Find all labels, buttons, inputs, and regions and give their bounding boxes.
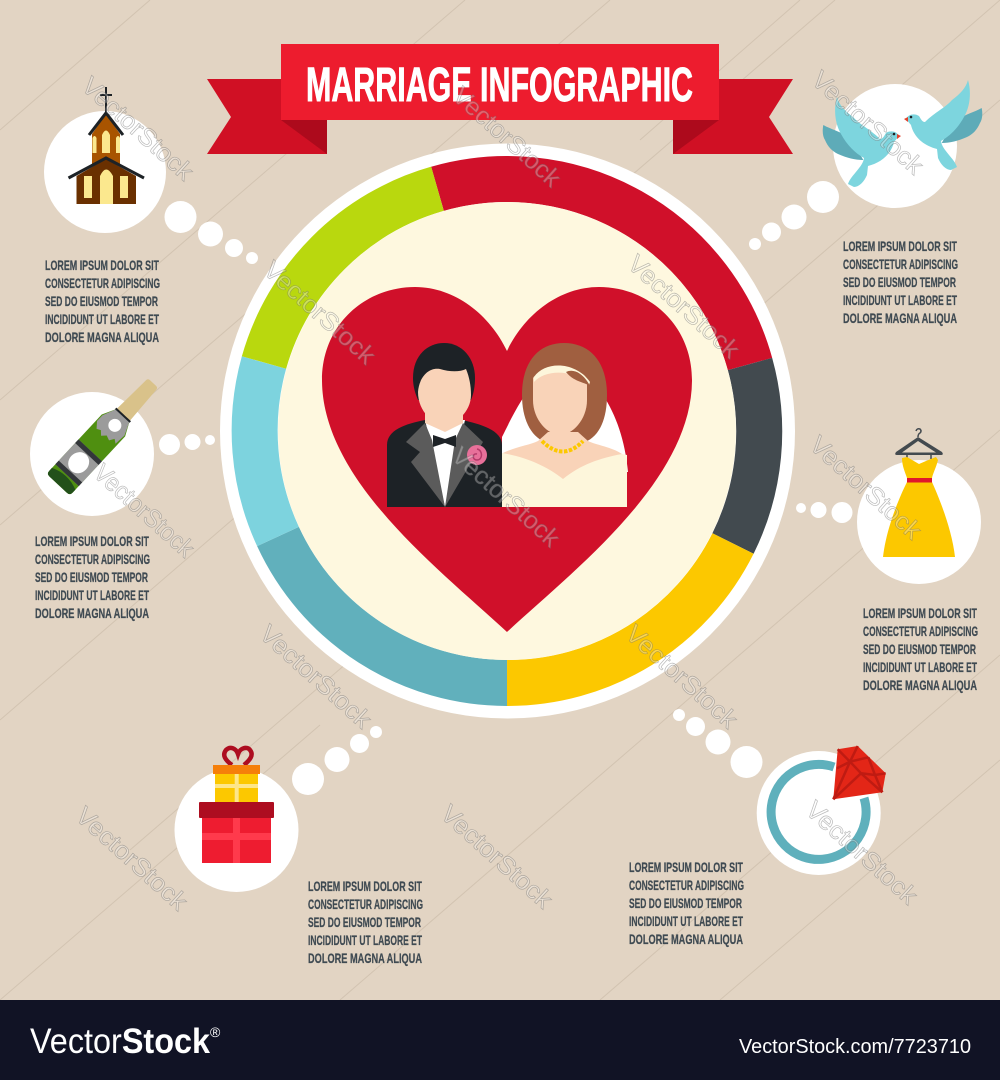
groom — [387, 343, 502, 507]
segment: red — [438, 179, 750, 364]
segment: lime — [264, 189, 438, 362]
text block — [35, 533, 150, 621]
watermarks: VectorStock — [70, 802, 193, 916]
watermarks: VectorStock — [620, 620, 743, 734]
left ribbon tail — [207, 79, 327, 154]
watermarks: VectorStock — [435, 800, 558, 914]
text block: CONSECTETUR ADIPISCING — [35, 551, 150, 567]
text block: INCIDIDUNT UT LABORE ET — [308, 932, 422, 948]
watermarks — [70, 66, 929, 916]
panel: gifts — [174, 726, 423, 966]
watermarks: VectorStock — [800, 796, 923, 910]
segment: teal — [278, 536, 507, 683]
text block: DOLORE MAGNA ALIQUA — [308, 950, 422, 966]
watermarks: VectorStock — [804, 431, 927, 545]
heart — [322, 287, 692, 632]
segment: yellow — [507, 544, 733, 683]
icon: left dove — [823, 97, 901, 187]
text block: INCIDIDUNT UT LABORE ET — [45, 311, 159, 327]
icon: dress on hanger — [883, 429, 955, 557]
footer logo: VectorStock — [30, 1022, 210, 1061]
text block: SED DO EIUSMOD TEMPOR — [629, 895, 742, 911]
icon: champagne bottle — [47, 372, 165, 496]
text block: CONSECTETUR ADIPISCING — [629, 877, 744, 893]
text block — [45, 257, 160, 345]
watermarks: VectorStock — [447, 82, 566, 193]
text block: DOLORE MAGNA ALIQUA — [45, 329, 159, 345]
right ribbon tail — [673, 79, 793, 154]
text block: INCIDIDUNT UT LABORE ET — [629, 913, 743, 929]
text block: CONSECTETUR ADIPISCING — [45, 275, 160, 291]
text block — [843, 238, 958, 326]
watermarks: VectorStock — [88, 459, 200, 563]
title ribbon — [207, 44, 793, 154]
text block — [863, 605, 978, 693]
watermarks: VectorStock — [446, 442, 565, 553]
text block: SED DO EIUSMOD TEMPOR — [35, 569, 148, 585]
watermarks: VectorStock — [806, 66, 929, 180]
panel: doves — [749, 80, 982, 326]
footer url: VectorStock.com/7723710 — [739, 1036, 971, 1058]
text block: SED DO EIUSMOD TEMPOR — [45, 293, 158, 309]
registered mark: ® — [210, 1024, 221, 1040]
panel: church — [44, 87, 258, 345]
text block: LOREM IPSUM DOLOR SIT — [35, 533, 149, 549]
donut chart — [220, 144, 795, 718]
panel: champagne — [30, 372, 215, 621]
text block: DOLORE MAGNA ALIQUA — [35, 605, 149, 621]
watermarks: VectorStock — [622, 250, 745, 364]
icon: church — [68, 87, 144, 204]
title: MARRIAGE INFOGRAPHIC — [306, 59, 693, 112]
text block: INCIDIDUNT UT LABORE ET — [35, 587, 149, 603]
text block: SED DO EIUSMOD TEMPOR — [308, 914, 421, 930]
panel: ring — [629, 709, 886, 947]
cream centre — [278, 202, 736, 660]
icon: diamond ring — [771, 746, 886, 859]
watermarks: VectorStock — [76, 72, 199, 186]
bride — [502, 343, 628, 507]
text block: LOREM IPSUM DOLOR SIT — [308, 878, 422, 894]
icon: right dove — [904, 80, 982, 170]
segment: charcoal — [733, 364, 759, 544]
icon: gift boxes — [199, 748, 274, 863]
segment: light blue — [255, 362, 278, 536]
text block: LOREM IPSUM DOLOR SIT — [629, 859, 743, 875]
text block: CONSECTETUR ADIPISCING — [308, 896, 423, 912]
text block: DOLORE MAGNA ALIQUA — [629, 931, 743, 947]
text block: LOREM IPSUM DOLOR SIT — [45, 257, 159, 273]
text block — [629, 859, 744, 947]
text block — [308, 878, 423, 966]
watermarks: VectorStock — [258, 256, 381, 370]
footer bar — [0, 1000, 1000, 1080]
watermarks: VectorStock — [254, 620, 377, 734]
panel: dress — [796, 429, 981, 693]
